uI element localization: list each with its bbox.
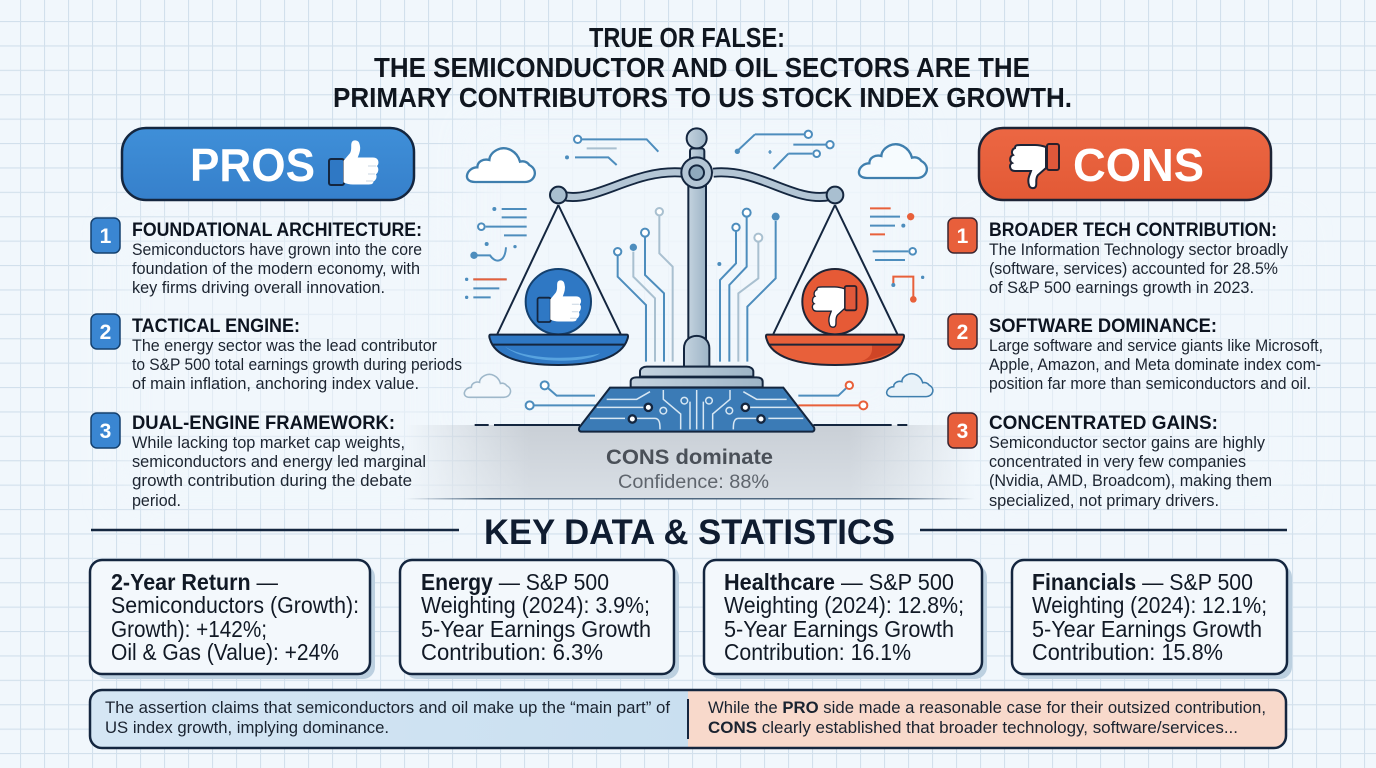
stat card: healthcare: Contribution: 16.1% — [724, 639, 911, 665]
pro item 1: foundation of the modern economy, with — [132, 260, 420, 278]
stat card: energy: Weighting (2024): 3.9%; — [421, 592, 650, 618]
pillar — [684, 128, 709, 367]
pro item 3: semiconductors and energy led marginal — [132, 453, 426, 471]
con item 2: Apple, Amazon, and Meta dominate index com- — [989, 356, 1321, 374]
stat card: 2-year return: Oil & Gas (Value): +24% — [111, 639, 339, 665]
icon: thumbs down — [1010, 144, 1059, 188]
base with circuit pattern — [579, 367, 814, 432]
title — [333, 22, 1072, 113]
verdict band background — [405, 425, 975, 500]
summary right text — [708, 699, 1266, 737]
con item 1: The Information Technology sector broadly — [989, 241, 1289, 259]
con item 1: 1 — [957, 225, 969, 248]
stat card: energy: 5-Year Earnings Growth — [421, 616, 651, 642]
con item 1: (software, services) accounted for 28.5% — [989, 260, 1278, 278]
stat card: 2-year return — [90, 560, 375, 679]
summary right text: While the PRO side made a reasonable case for their outsized contribution, — [708, 699, 1266, 717]
stat card: financials: 5-Year Earnings Growth — [1032, 616, 1262, 642]
stat card: financials: Financials — S&P 500 — [1032, 569, 1253, 595]
con item 2: position far more than semiconductors and oil. — [989, 375, 1311, 393]
pro item 2: The energy sector was the lead contributor — [132, 337, 438, 355]
con item 3: concentrated in very few companies — [989, 453, 1246, 471]
con item 3: 3 — [957, 420, 968, 443]
stat card: energy: Energy — S&P 500 — [421, 569, 609, 595]
pro item 3: growth contribution during the debate — [132, 472, 412, 490]
pro item 3: 3 — [100, 420, 111, 443]
con item 2: Large software and service giants like Microsoft, — [989, 337, 1323, 355]
panel: pros — [91, 128, 462, 510]
stat card: energy — [400, 560, 679, 679]
stat card: healthcare — [704, 560, 987, 679]
stat card: 2-year return: 2-Year Return — — [111, 569, 278, 595]
con item 1: BROADER TECH CONTRIBUTION: — [989, 220, 1277, 241]
verdict: CONS dominate — [606, 445, 773, 469]
title: PRIMARY CONTRIBUTORS TO US STOCK INDEX GROWTH. — [333, 82, 1072, 113]
con item 2: SOFTWARE DOMINANCE: — [989, 316, 1217, 337]
pro item 2: 2 — [100, 321, 111, 344]
stat card: 2-year return: Growth): +142%; — [111, 616, 267, 642]
pro item 3: While lacking top market cap weights, — [132, 434, 405, 452]
stat card: energy: Contribution: 6.3% — [421, 639, 603, 665]
con item 3: specialized, not primary drivers. — [989, 492, 1219, 510]
stat card: healthcare: Healthcare — S&P 500 — [724, 569, 954, 595]
verdict: Confidence: 88% — [618, 472, 769, 493]
stat card: financials: Weighting (2024): 12.1%; — [1032, 592, 1267, 618]
clouds — [464, 144, 933, 397]
icon: thumbs up — [329, 141, 378, 185]
circuit traces — [473, 131, 916, 409]
pro item 1: key firms driving overall innovation. — [132, 279, 385, 297]
con item 1: of S&P 500 earnings growth in 2023. — [989, 279, 1254, 297]
pro item 3 — [91, 413, 426, 510]
cons button — [979, 128, 1271, 200]
con item 3: CONCENTRATED GAINS: — [989, 413, 1218, 434]
beam — [550, 157, 843, 203]
stat card: 2-year return: Semiconductors (Growth): — [111, 592, 359, 618]
pro item 2: TACTICAL ENGINE: — [132, 316, 300, 337]
right pan hangers and pan — [766, 205, 904, 365]
con item 2: 2 — [957, 321, 968, 344]
verdict — [606, 445, 773, 493]
pros button — [122, 128, 414, 200]
pro item 1 — [91, 218, 422, 297]
pros button: PROS — [190, 139, 315, 191]
stat card: financials — [1012, 560, 1292, 679]
title: THE SEMICONDUCTOR AND OIL SECTORS ARE THE — [374, 52, 1030, 83]
heading: key data and statistics: KEY DATA & STATISTICS — [484, 513, 895, 552]
icon: thumbs up circle — [526, 269, 591, 334]
left pan hangers and pan — [489, 205, 628, 365]
stat card: healthcare: Weighting (2024): 12.8%; — [724, 592, 964, 618]
stat card: financials: Contribution: 15.8% — [1032, 639, 1223, 665]
icon: thumbs down circle — [802, 269, 868, 334]
pro item 1: Semiconductors have grown into the core — [132, 241, 422, 259]
cons button: CONS — [1073, 139, 1204, 191]
pro item 1: FOUNDATIONAL ARCHITECTURE: — [132, 220, 422, 241]
summary left text — [105, 699, 670, 737]
summary left text: The assertion claims that semiconductors and oil make up the “main part” of — [105, 699, 670, 717]
pro item 3: DUAL-ENGINE FRAMEWORK: — [132, 413, 395, 434]
pro item 2: to S&P 500 total earnings growth during periods — [132, 356, 462, 374]
summary left text: US index growth, implying dominance. — [105, 719, 389, 737]
title: TRUE OR FALSE: — [589, 22, 785, 53]
con item 2 — [948, 314, 1323, 393]
con item 3: (Nvidia, AMD, Broadcom), making them — [989, 472, 1272, 490]
con item 1 — [948, 218, 1289, 297]
pro item 1: 1 — [100, 225, 112, 248]
scale illustration — [464, 128, 933, 432]
con item 3: Semiconductor sector gains are highly — [989, 434, 1266, 452]
panel: cons — [948, 128, 1323, 510]
summary bar — [90, 690, 1286, 748]
pro item 2 — [91, 314, 462, 393]
ground dash — [475, 422, 907, 428]
summary right text: CONS clearly established that broader technology, software/services... — [708, 719, 1238, 737]
pro item 3: period. — [132, 492, 181, 510]
con item 3 — [948, 413, 1272, 510]
stat card: healthcare: 5-Year Earnings Growth — [724, 616, 954, 642]
pro item 2: of main inflation, anchoring index value. — [132, 375, 419, 393]
